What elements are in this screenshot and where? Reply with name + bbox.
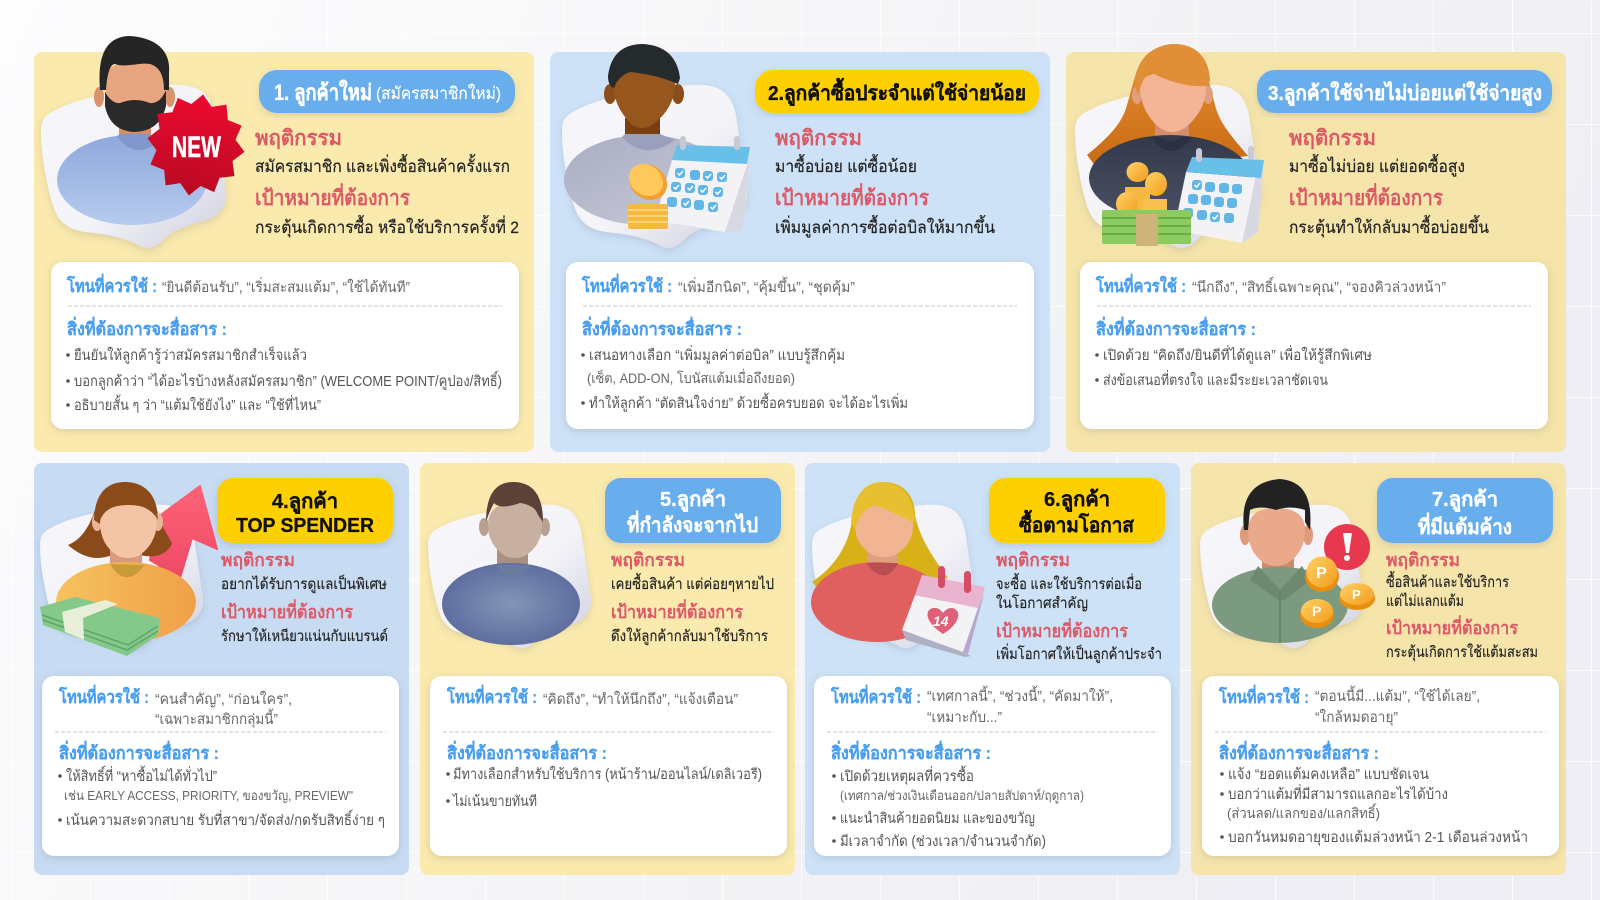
tone words: [1315, 685, 1480, 726]
message bullets: ให้สิทธิ์ที่ “หาซื้อไม่ได้ทั่วไป”: [66, 765, 217, 785]
tone words: “เทศกาลนี้”, “ช่วงนี้”, “คัดมาให้”,: [927, 685, 1113, 705]
behaviour heading: พฤติกรรม: [996, 550, 1070, 570]
title pill: 5.ลูกค้า: [660, 488, 726, 513]
illustration: bearded man with NEW badge: [41, 36, 252, 248]
goal text: กระตุ้นทำให้กลับมาซื้อบ่อยขึ้น: [1289, 215, 1489, 238]
title pill: 1. ลูกค้าใหม่: [274, 79, 372, 107]
title pill: [755, 70, 1039, 113]
title pill: [1257, 70, 1552, 113]
panel 4: top spender: [34, 463, 409, 875]
message heading: สิ่งที่ต้องการจะสื่อสาร :: [59, 740, 219, 763]
goal heading: เป้าหมายที่ต้องการ: [1386, 615, 1518, 638]
behaviour text: สมัครสมาชิก และเพิ่งซื้อสินค้าครั้งแรก: [255, 154, 510, 176]
message bullets: อธิบายสั้น ๆ ว่า “แต้มใช้ยังไง” และ “ใช้ที่ไหน”: [74, 394, 321, 414]
illustration: woman with valentine calendar: [811, 482, 985, 657]
title pill: (สมัครสมาชิกใหม่): [376, 83, 501, 103]
tone words: “คิดถึง”, “ทำให้นึกถึง”, “แจ้งเตือน”: [543, 690, 738, 708]
message bullets: ยืนยันให้ลูกค้ารู้ว่าสมัครสมาชิกสำเร็จแล้ว: [74, 345, 307, 364]
behaviour heading: พฤติกรรม: [255, 127, 342, 150]
title pill: [605, 478, 781, 543]
message bullets: ส่งข้อเสนอที่ตรงใจ และมีระยะเวลาชัดเจน: [1103, 370, 1328, 389]
goal text: กระตุ้นเกิดการซื้อ หรือใช้บริการครั้งที่ 2: [255, 215, 519, 238]
tone words: “นึกถึง”, “สิทธิ์เฉพาะคุณ”, “จองคิวล่วงหน้า”: [1192, 276, 1446, 296]
tone words: “เพิ่มอีกนิด”, “คุ้มขึ้น”, “ชุดคุ้ม”: [678, 276, 855, 296]
message bullets: (เซ็ต, ADD-ON, โบนัสแต้มเมื่อถึงยอด): [587, 369, 795, 386]
message bullets: มีเวลาจำกัด (ช่วงเวลา/จำนวนจำกัด): [840, 833, 1046, 850]
behaviour text: มาซื้อไม่บ่อย แต่ยอดซื้อสูง: [1289, 154, 1465, 177]
title pill: 7.ลูกค้า: [1432, 488, 1498, 513]
illustration: man with coins and calendar: [562, 44, 750, 248]
illustration: man: [428, 482, 591, 648]
behaviour heading: พฤติกรรม: [611, 550, 685, 570]
behaviour text: มาซื้อบ่อย แต่ซื้อน้อย: [775, 154, 917, 176]
title pill: 3.ลูกค้าใช้จ่ายไม่บ่อยแต่ใช้จ่ายสูง: [1268, 81, 1542, 107]
message bullets: [446, 765, 762, 810]
illustration: man with points coins: P: [1312, 603, 1321, 619]
behaviour text: อยากได้รับการดูแลเป็นพิเศษ: [221, 574, 387, 593]
message heading: สิ่งที่ต้องการจะสื่อสาร :: [1096, 316, 1256, 339]
message bullets: บอกวันหมดอายุของแต้มล่วงหน้า 2-1 เดือนล่วงหน้า: [1228, 829, 1528, 846]
panel 7: points remaining: [1191, 463, 1566, 875]
behaviour text: [996, 573, 1142, 612]
tone words: “ยินดีต้อนรับ”, “เริ่มสะสมแต้ม”, “ใช้ได้ทันที”: [162, 277, 410, 296]
message bullets: [581, 345, 908, 412]
behaviour text: เคยซื้อสินค้า แต่ค่อยๆหายไป: [611, 573, 774, 593]
message bullets: (เทศกาล/ช่วงเงินเดือนออก/ปลายสัปดาห์/ฤดูกาล): [840, 788, 1084, 804]
message bullets: [66, 345, 502, 414]
illustration: woman with valentine calendar: 14: [933, 613, 949, 629]
goal text: ดึงให้ลูกค้ากลับมาใช้บริการ: [611, 627, 768, 645]
message bullets: เช่น EARLY ACCESS, PRIORITY, ของขวัญ, PREVIEW": [64, 788, 353, 803]
message bullets: [1095, 345, 1372, 389]
title pill: [259, 70, 515, 113]
behaviour heading: พฤติกรรม: [1289, 127, 1376, 150]
goal text: กระตุ้นเกิดการใช้แต้มสะสม: [1386, 643, 1538, 662]
behaviour text: ในโอกาศสำคัญ: [996, 594, 1088, 612]
illustration: bearded man with NEW badge: NEW: [172, 131, 221, 164]
tone label: โทนที่ควรใช้ :: [1218, 684, 1309, 707]
detail card: [814, 676, 1171, 856]
detail card: [430, 676, 787, 856]
behaviour heading: พฤติกรรม: [221, 550, 295, 570]
tone label: โทนที่ควรใช้ :: [58, 684, 149, 707]
behaviour heading: พฤติกรรม: [1386, 550, 1460, 570]
title pill: 2.ลูกค้าซื้อประจำแต่ใช้จ่ายน้อย: [768, 77, 1026, 107]
goal text: รักษาให้เหนียวแน่นกับแบรนด์: [221, 627, 388, 645]
message heading: สิ่งที่ต้องการจะสื่อสาร :: [582, 316, 742, 339]
behaviour text: [1386, 571, 1509, 610]
detail card: [566, 262, 1034, 429]
behaviour heading: พฤติกรรม: [775, 127, 862, 150]
goal heading: เป้าหมายที่ต้องการ: [775, 182, 930, 210]
message bullets: เสนอทางเลือก “เพิ่มมูลค่าต่อบิล” แบบรู้สึกคุ้ม: [589, 345, 845, 364]
title pill: 4.ลูกค้า: [272, 490, 338, 515]
detail card: [1080, 262, 1548, 429]
panel 3: infrequent high spender: [1066, 44, 1566, 452]
goal heading: เป้าหมายที่ต้องการ: [221, 599, 353, 622]
message bullets: แจ้ง “ยอดแต้มคงเหลือ” แบบชัดเจน: [1228, 766, 1429, 783]
message heading: สิ่งที่ต้องการจะสื่อสาร :: [447, 740, 607, 763]
tone words: “เหมาะกับ...”: [927, 710, 1002, 726]
message bullets: ทำให้ลูกค้า “ตัดสินใจง่าย” ด้วยซื้อครบยอด จะได้อะไรเพิ่ม: [589, 392, 908, 412]
tone words: [927, 685, 1113, 726]
tone label: โทนที่ควรใช้ :: [446, 684, 537, 707]
title pill: ที่กำลังจะจากไป: [627, 510, 758, 537]
tone words: [155, 690, 292, 728]
message bullets: เน้นความสะดวกสบาย รับที่สาขา/จัดส่ง/กดรับสิทธิ์ง่าย ๆ: [66, 809, 385, 829]
goal heading: เป้าหมายที่ต้องการ: [255, 182, 411, 210]
panel 1: new customer: [34, 36, 534, 452]
tone label: โทนที่ควรใช้ :: [66, 273, 157, 296]
tone words: “คนสำคัญ”, “ก่อนใคร”,: [155, 690, 292, 708]
title pill: [1377, 478, 1553, 543]
behaviour text: แต่ไม่แลกแต้ม: [1386, 592, 1464, 610]
illustration: woman with arrow and cash: [40, 482, 217, 656]
message bullets: บอกว่าแต้มที่มีสามารถแลกอะไรได้บ้าง: [1228, 784, 1448, 803]
tone words: “ตอนนี้มี...แต้ม”, “ใช้ได้เลย”,: [1315, 685, 1480, 705]
illustration: man with points coins: P: [1316, 565, 1327, 582]
message bullets: [58, 765, 385, 829]
goal heading: เป้าหมายที่ต้องการ: [611, 599, 743, 622]
message bullets: เปิดด้วยเหตุผลที่ควรซื้อ: [840, 765, 974, 785]
title pill: TOP SPENDER: [236, 514, 374, 537]
detail card: [1202, 676, 1559, 856]
illustration: man with points coins: [1200, 479, 1375, 648]
message bullets: [1220, 766, 1528, 846]
message bullets: ไม่เน้นขายทันที: [452, 792, 537, 810]
panel 2: frequent low spender: [550, 44, 1050, 452]
behaviour text: ซื้อสินค้าและใช้บริการ: [1386, 571, 1509, 591]
message heading: สิ่งที่ต้องการจะสื่อสาร :: [67, 316, 227, 339]
message bullets: (ส่วนลด/แลกของ/แลกสิทธิ์): [1227, 803, 1380, 821]
tone label: โทนที่ควรใช้ :: [830, 684, 921, 707]
title pill: 6.ลูกค้า: [1044, 488, 1110, 513]
goal heading: เป้าหมายที่ต้องการ: [1289, 182, 1444, 210]
goal heading: เป้าหมายที่ต้องการ: [996, 618, 1128, 641]
message bullets: บอกลูกค้าว่า “ได้อะไรบ้างหลังสมัครสมาชิก” (WELCOME POINT/คูปอง/สิทธิ์): [74, 370, 502, 390]
illustration: woman with money and calendar: [1075, 44, 1264, 248]
panel 5: leaving customer: [420, 463, 795, 875]
message bullets: มีทางเลือกสำหรับใช้บริการ (หน้าร้าน/ออนไลน์/เดลิเวอรี): [453, 765, 762, 783]
detail card: [51, 262, 519, 429]
detail card: [42, 676, 399, 856]
tone label: โทนที่ควรใช้ :: [1095, 273, 1186, 296]
message bullets: [832, 765, 1084, 850]
goal text: เพิ่มมูลค่าการซื้อต่อบิลให้มากขึ้น: [775, 215, 995, 238]
tone words: “เฉพาะสมาชิกกลุ่มนี้”: [155, 708, 278, 728]
panel 6: occasional buyer: [805, 463, 1180, 875]
title pill: [989, 478, 1165, 543]
title pill: ที่มีแต้มค้าง: [1418, 512, 1512, 539]
title pill: ซื้อตามโอกาส: [1019, 509, 1134, 537]
message heading: สิ่งที่ต้องการจะสื่อสาร :: [831, 740, 991, 763]
tone label: โทนที่ควรใช้ :: [581, 273, 672, 296]
message bullets: แนะนำสินค้ายอดนิยม และของขวัญ: [840, 810, 1035, 827]
goal text: เพิ่มโอกาศให้เป็นลูกค้าประจำ: [996, 643, 1162, 663]
behaviour text: จะซื้อ และใช้บริการต่อเมื่อ: [996, 573, 1142, 593]
illustration: man with points coins: P: [1352, 587, 1361, 602]
tone words: “ใกล้หมดอายุ”: [1315, 708, 1398, 726]
message bullets: เปิดด้วย “คิดถึง/ยินดีที่ได้ดูแล” เพื่อให้รู้สึกพิเศษ: [1103, 345, 1372, 364]
message heading: สิ่งที่ต้องการจะสื่อสาร :: [1219, 740, 1379, 763]
title pill: [217, 478, 393, 543]
